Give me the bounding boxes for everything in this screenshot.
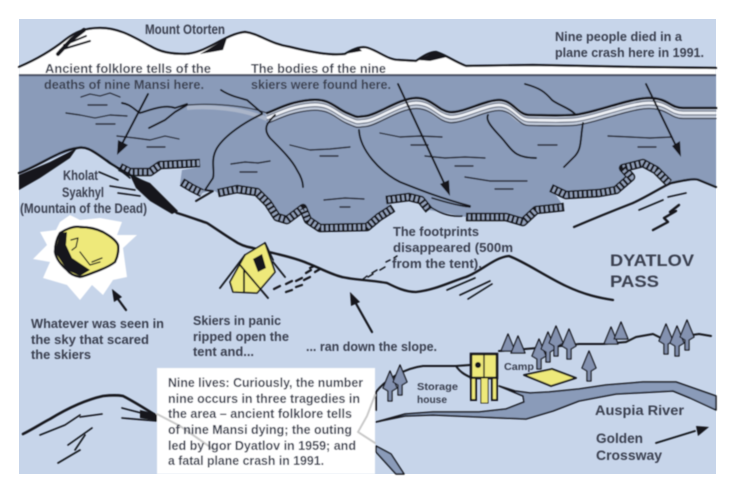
label: Kholat Syakhyl: Kholat (63, 168, 98, 183)
icon: camp tarp (524, 369, 576, 386)
label: Kholat Syakhyl: (Mountain of the Dead) (20, 201, 147, 216)
right ridge (574, 179, 716, 230)
label: bodies found (251, 62, 391, 92)
lower ridge and far hill (342, 256, 613, 300)
label: camp: Camp (504, 361, 534, 373)
label: seen in the sky: Whatever was seen in (31, 317, 164, 331)
arrow: ran down the slope (350, 292, 372, 332)
label: plane crash (555, 30, 704, 60)
icon: ripped tent (220, 243, 285, 298)
label: plane crash: plane crash here in 1991. (555, 46, 704, 60)
label: bodies found: skiers were found here. (251, 78, 391, 92)
footprints (274, 256, 397, 292)
label: storage house (417, 381, 458, 406)
label: Golden Crossway: Golden (596, 431, 643, 446)
label: seen in the sky: the skiers (31, 348, 91, 362)
Auspia River (376, 382, 716, 422)
callout box: Nine lives: of nine Mansi dying; the outing (168, 423, 352, 437)
heading: Dyatlov Pass: PASS (610, 272, 659, 291)
distant mountains: Mount Otorten range (19, 28, 716, 75)
label: footprints: disappeared (500m (393, 241, 513, 255)
pine trees (383, 320, 694, 401)
label: bodies found: The bodies of the nine (251, 62, 386, 76)
label: Golden Crossway: Crossway (596, 448, 662, 463)
frozen river across the valley (187, 98, 716, 127)
label: skiers in panic: tent and... (193, 345, 254, 359)
icon: storage house on stilts (471, 354, 497, 403)
heading: Dyatlov Pass: DYATLOV (610, 251, 695, 270)
bottom left hill (23, 395, 157, 463)
callout box: Nine lives (157, 368, 375, 474)
label: footprints (392, 225, 513, 271)
callout box: Nine lives: a fatal plane crash in 1991. (168, 454, 324, 468)
small cliff at lower edge (376, 446, 404, 474)
label: Golden Crossway (596, 431, 662, 463)
label: Mansi folklore (44, 62, 211, 92)
valley band (19, 76, 716, 228)
arrow to sky object (112, 289, 126, 310)
label: Mansi folklore: Ancient folklore tells of the (45, 62, 211, 76)
label: storage house: Storage (417, 381, 458, 393)
heading: Dyatlov Pass (610, 251, 695, 291)
label: Kholat Syakhyl: Syakhyl (62, 185, 104, 200)
label: ran down the slope: ... ran down the slope. (306, 340, 437, 354)
arrow: bodies found (398, 84, 450, 196)
Kholat Syakhyl mountain ridge (19, 147, 342, 277)
label: Kholat Syakhyl (20, 168, 147, 216)
label: seen in the sky (31, 317, 164, 362)
label: footprints: from the tent). (392, 257, 482, 271)
label: skiers in panic (193, 314, 289, 359)
camp and storage ridge line (376, 334, 711, 410)
arrow: plane crash (646, 84, 681, 157)
arrow: Mansi deaths (117, 94, 148, 155)
label: seen in the sky: the sky that scared (31, 333, 149, 347)
arrow: Golden Crossway (656, 426, 709, 443)
label: plane crash: Nine people died in a (555, 30, 683, 44)
forest marks on valley floor (66, 93, 672, 207)
label: Auspia River: Auspia River (595, 403, 685, 418)
callout box: Nine lives: led by Igor Dyatlov in 1959; and (168, 439, 356, 453)
icon: glowing object in the sky (33, 215, 137, 300)
callout box: Nine lives: the area – ancient folklore tells (168, 407, 352, 421)
label: skiers in panic: Skiers in panic (193, 314, 281, 328)
label: footprints: The footprints (393, 225, 479, 239)
callout box: Nine lives: nine occurs in three tragedies in (168, 392, 360, 406)
label: skiers in panic: ripped open the (193, 330, 289, 344)
label: Mount Otorten: Mount Otorten (145, 21, 225, 37)
label: Mansi folklore: deaths of nine Mansi here. (44, 78, 204, 92)
callout box: Nine lives: Nine lives: Curiously, the number (168, 376, 363, 390)
label: storage house: house (417, 394, 447, 406)
hatched cliff edges (120, 163, 669, 228)
tributary streams (122, 84, 583, 206)
valley slope below the cliffs (429, 198, 470, 216)
